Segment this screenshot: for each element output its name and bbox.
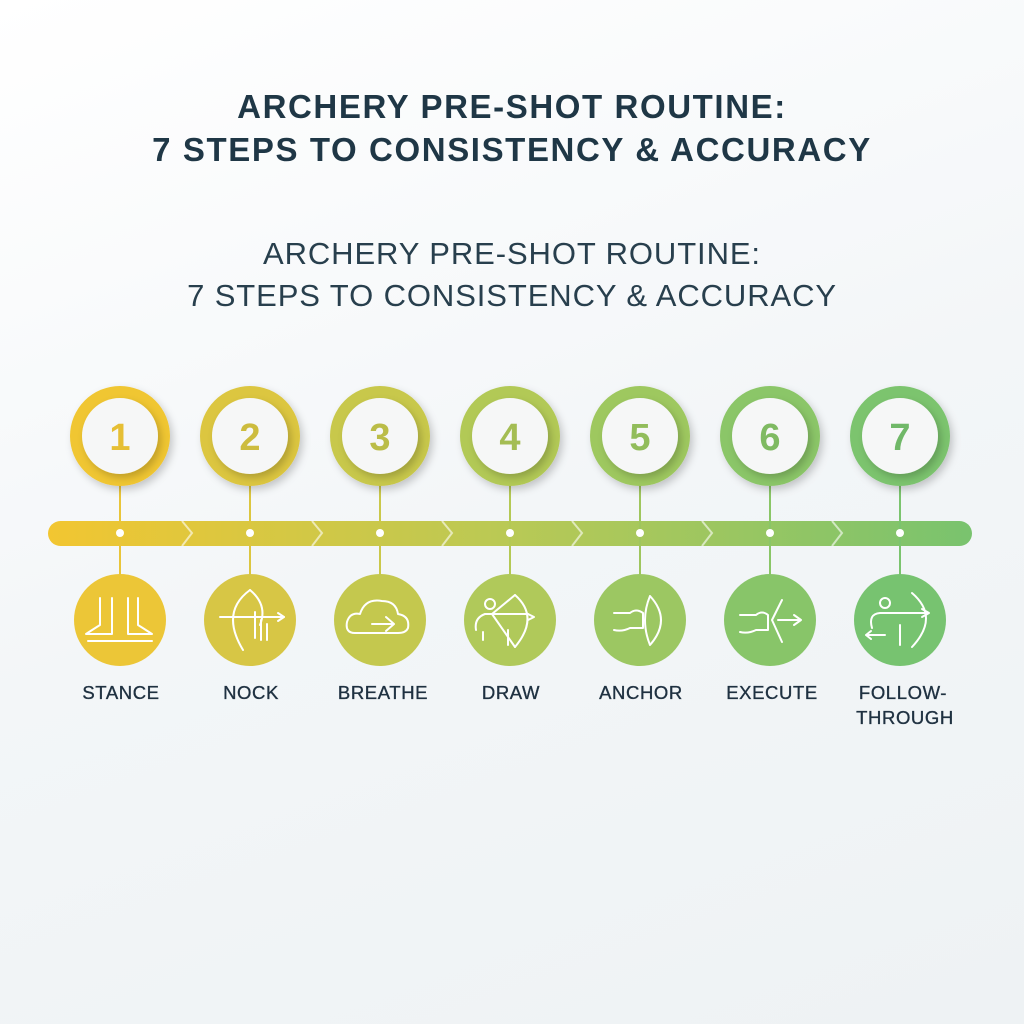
labels: BREATHE <box>338 682 428 703</box>
icon: follow-through <box>866 593 929 647</box>
step 3: 3 <box>369 417 391 459</box>
subtitle (repeated title) <box>187 236 837 313</box>
icon: draw <box>476 595 534 647</box>
step 3 <box>330 386 430 666</box>
icon: anchor <box>614 596 661 645</box>
subtitle (repeated title): 7 STEPS TO CONSISTENCY & ACCURACY <box>187 278 837 313</box>
icon: stance feet <box>86 598 152 641</box>
labels <box>82 682 954 728</box>
title: 7 STEPS TO CONSISTENCY & ACCURACY <box>152 131 872 168</box>
icon: breathe cloud <box>347 601 408 633</box>
labels: THROUGH <box>856 707 954 728</box>
step 5: 5 <box>629 417 651 459</box>
step 7: 7 <box>889 417 911 459</box>
progress bar <box>48 521 972 546</box>
labels: DRAW <box>482 682 540 703</box>
title <box>152 88 872 168</box>
labels: ANCHOR <box>599 682 683 703</box>
step 1: 1 <box>109 417 131 459</box>
step 1 <box>70 386 170 666</box>
step 2 <box>200 386 300 666</box>
title: ARCHERY PRE-SHOT ROUTINE: <box>237 88 787 125</box>
step 6 <box>720 386 820 666</box>
subtitle (repeated title): ARCHERY PRE-SHOT ROUTINE: <box>263 236 761 271</box>
step 4: 4 <box>499 417 521 459</box>
step 7 <box>850 386 950 666</box>
step 6: 6 <box>759 417 781 459</box>
labels: EXECUTE <box>726 682 818 703</box>
icon: execute <box>740 600 801 642</box>
icon: nock <box>220 590 284 650</box>
step 2: 2 <box>239 417 261 459</box>
labels: FOLLOW- <box>859 682 947 703</box>
step 5 <box>590 386 690 666</box>
labels: NOCK <box>223 682 279 703</box>
step 4 <box>460 386 560 666</box>
labels: STANCE <box>82 682 160 703</box>
icons <box>86 590 929 650</box>
